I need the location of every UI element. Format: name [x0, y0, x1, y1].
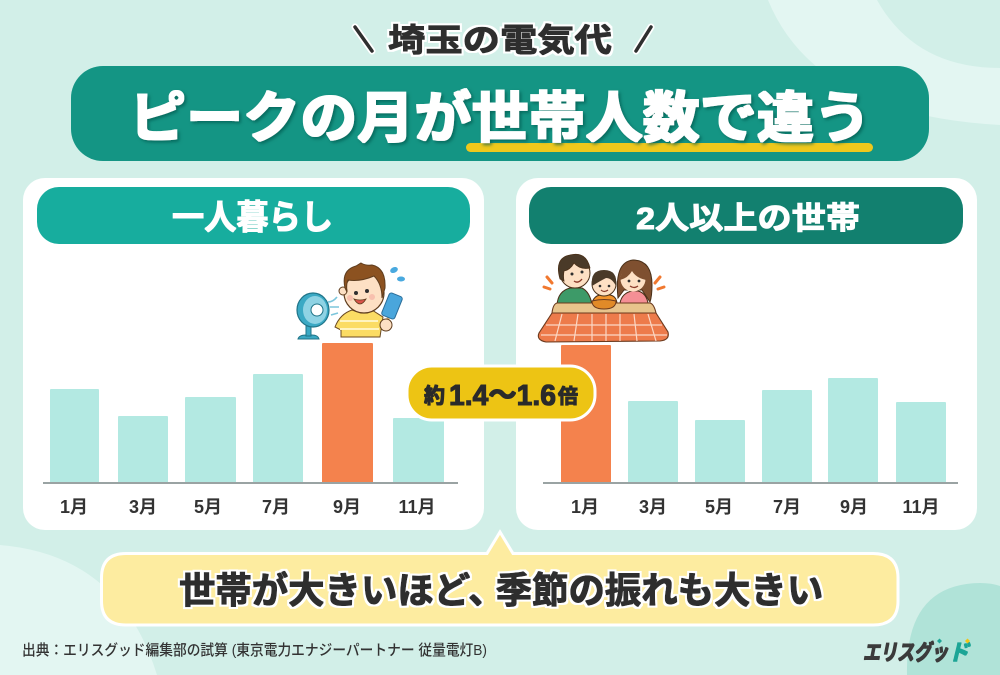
accent marks [544, 277, 664, 289]
panel heading [529, 187, 963, 244]
topic heading [355, 22, 651, 58]
logo: エリスグッ [863, 640, 949, 665]
callout [102, 532, 898, 625]
bar chart: single household: 1月 [60, 497, 88, 517]
panel: single household [23, 178, 484, 530]
panel heading: 2人以上の世帯 [636, 201, 860, 236]
callout: 世帯が大きいほど、季節の振れも大きい [179, 570, 823, 611]
multiplier badge: 約 [424, 385, 445, 408]
sweat drops [389, 266, 399, 274]
panel: households of two or more [516, 178, 977, 530]
ice pop [385, 316, 389, 327]
bar chart: two or more: 7月 [773, 497, 801, 517]
bar chart: two or more: 5月 [705, 497, 733, 517]
bowl [592, 300, 616, 309]
fan [297, 293, 329, 339]
bar chart: two or more: 9月 [840, 497, 868, 517]
bar chart: single household: 9月 [333, 497, 361, 517]
table top [552, 303, 656, 313]
multiplier badge: 倍 [558, 385, 578, 408]
title banner [71, 66, 929, 161]
topic heading: 埼玉の電気代 [388, 22, 612, 58]
quilt [538, 313, 668, 342]
icon: family at kotatsu [538, 254, 668, 342]
logo: ド [948, 640, 971, 665]
bar chart: two or more [543, 345, 958, 517]
panel heading [37, 187, 470, 244]
child [592, 295, 617, 303]
bar chart: two or more: 1月 [571, 497, 599, 517]
bar chart: two or more: 11月 [902, 497, 940, 517]
mother [617, 260, 652, 302]
multiplier badge [407, 366, 595, 420]
bar chart: single household: 5月 [194, 497, 222, 517]
source note: 出典：エリスグッド編集部の試算 (東京電力エナジーパートナー 従量電灯B) [22, 641, 487, 659]
icon: boy with fan and ice pop [297, 263, 405, 339]
head [344, 273, 384, 313]
bar chart: single household: 11月 [398, 497, 436, 517]
bar chart: single household [43, 343, 458, 517]
multiplier badge: 1.4～1.6 [449, 380, 556, 412]
panel heading: 一人暮らし [172, 199, 333, 237]
shirt [335, 310, 383, 337]
bar chart: single household: 3月 [129, 497, 157, 517]
bar chart: two or more: 3月 [639, 497, 667, 517]
father [557, 288, 592, 305]
title banner: ピークの月が世帯人数で違う [129, 87, 871, 149]
bar chart: single household: 7月 [262, 497, 290, 517]
